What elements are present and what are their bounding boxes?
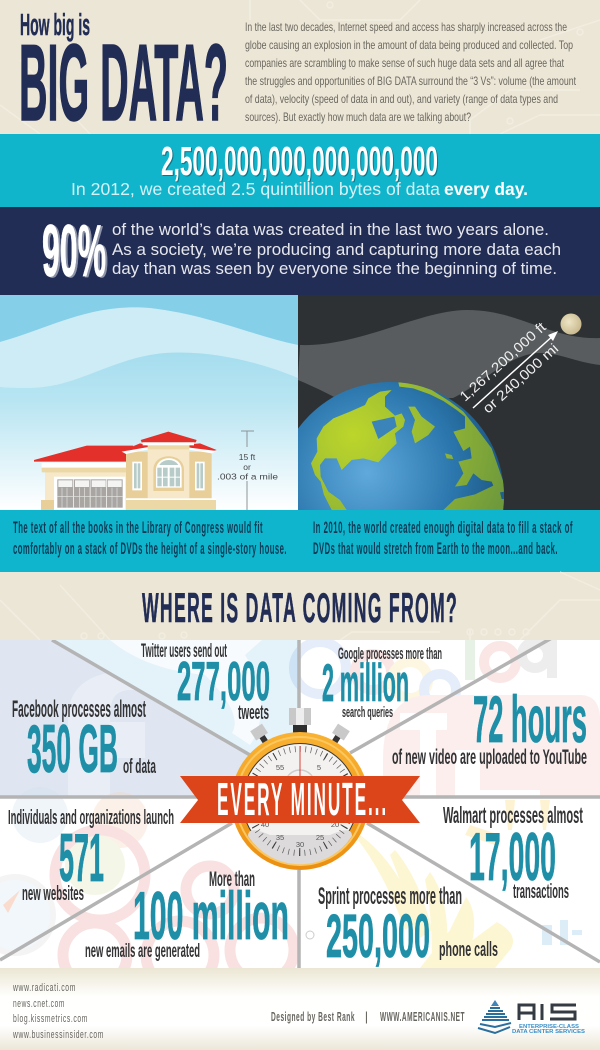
arrow: earth to moon distance bbox=[473, 331, 558, 408]
watermark: google bbox=[294, 640, 552, 706]
sources: blog.kissmetrics.com bbox=[13, 1013, 88, 1025]
banner: 90 percent: As a society, we’re producing and capturing more data each bbox=[112, 240, 561, 259]
diagonal dividers bbox=[0, 635, 600, 968]
stat: facebook: 350 GB bbox=[27, 711, 118, 787]
sources: www.businessinsider.com bbox=[12, 1029, 104, 1041]
height measure: .003 of a mile bbox=[217, 472, 278, 482]
logo: AIS: DATA CENTER SERVICES bbox=[512, 1029, 585, 1035]
logo: AIS: ENTERPRISE-CLASS bbox=[519, 1024, 579, 1030]
caption band: comfortably on a stack of DVDs the height of a single-story house. bbox=[13, 540, 287, 558]
banner: 2.5 quintillion: every day. bbox=[444, 179, 528, 199]
stat: walmart bbox=[443, 802, 583, 903]
icon: earth bbox=[298, 382, 504, 510]
distance labels bbox=[456, 319, 561, 416]
icon: stopwatch: 30 bbox=[296, 840, 304, 849]
watermark: twitter bbox=[52, 640, 298, 760]
stat: google: search queries bbox=[342, 704, 393, 721]
stat: sprint bbox=[318, 883, 498, 970]
panel: every minute stats: Google processes more than bbox=[338, 644, 442, 663]
stat: facebook bbox=[12, 700, 156, 774]
icon: stopwatch: 35 bbox=[276, 833, 284, 842]
icon: stopwatch: 20 bbox=[331, 820, 339, 829]
stat: google: 2 million bbox=[322, 654, 409, 713]
watermark: sprint fan bbox=[358, 835, 513, 968]
watermark: walmart bbox=[306, 800, 582, 945]
icon: stopwatch bbox=[231, 708, 369, 870]
icon: stopwatch: 25 bbox=[316, 833, 324, 842]
watermark: facebook bbox=[0, 640, 250, 797]
stat: sprint: 250,000 bbox=[326, 902, 430, 970]
watermark: email at signs bbox=[55, 830, 294, 989]
height measure bbox=[217, 431, 278, 510]
stat: websites: new websites bbox=[22, 883, 84, 905]
banner: 90 percent: of the world’s data was created in the last two years alone. bbox=[112, 220, 549, 239]
sources: news.cnet.com bbox=[13, 998, 65, 1010]
banner: 90 percent: 90% bbox=[42, 211, 106, 292]
caption: earth to moon bbox=[313, 519, 573, 558]
title: How big is bbox=[20, 7, 90, 42]
stat: google bbox=[322, 644, 442, 721]
stat: twitter: Twitter users send out bbox=[141, 640, 227, 662]
stat: twitter bbox=[141, 640, 270, 724]
intro text bbox=[245, 20, 576, 124]
distance labels: or 240,000 mi bbox=[479, 340, 561, 416]
title bbox=[19, 7, 228, 144]
stat: youtube bbox=[392, 694, 587, 768]
credits: Designed by Best Rank bbox=[271, 1009, 355, 1024]
panel: every minute stats: 100 million bbox=[133, 878, 289, 954]
banner: 2.5 quintillion bbox=[0, 134, 600, 207]
stat: emails bbox=[85, 868, 289, 962]
height measure: or bbox=[243, 462, 251, 472]
banner: every minute bbox=[180, 773, 420, 825]
panel: every minute stats: Facebook processes almost bbox=[12, 696, 146, 723]
panel: house comparison bbox=[0, 295, 298, 510]
stat: websites bbox=[8, 807, 174, 905]
icon: stopwatch: 55 bbox=[276, 763, 284, 772]
distance labels: 1,267,200,000 ft bbox=[456, 319, 549, 404]
stat: emails: new emails are generated bbox=[85, 941, 200, 962]
caption: library of congress: The text of all the books in the Library of Congress would fit bbox=[13, 519, 263, 537]
height measure: 15 ft bbox=[239, 452, 256, 462]
panel: every minute stats: 277,000 bbox=[177, 650, 270, 712]
icon: stopwatch: 5 bbox=[317, 763, 321, 772]
stat: twitter: tweets bbox=[238, 702, 269, 724]
caption: library of congress bbox=[13, 519, 287, 558]
credits: WWW.AMERICANIS.NET bbox=[380, 1009, 465, 1024]
footer bbox=[0, 968, 600, 1050]
section heading band bbox=[0, 572, 600, 640]
stat: facebook: of data bbox=[123, 756, 156, 778]
icon: moon bbox=[560, 314, 582, 334]
credits: | bbox=[365, 1009, 369, 1024]
intro text: sources). But exactly how much data are we talking about? bbox=[245, 110, 471, 124]
stat: websites: 571 bbox=[59, 820, 104, 896]
stat: sprint: phone calls bbox=[439, 939, 498, 961]
logo: AIS bbox=[478, 1000, 585, 1035]
caption band bbox=[0, 510, 600, 572]
panel: every minute stats bbox=[0, 635, 600, 989]
panel: earth to moon bbox=[298, 295, 600, 510]
watermark: youtube bbox=[383, 695, 600, 797]
banner: 2.5 quintillion: In 2012, we created 2.5 quintillion bytes of data bbox=[71, 179, 440, 199]
icon: stopwatch: 40 bbox=[261, 820, 269, 829]
banner: 90 percent: day than was seen by everyone since the beginning of time. bbox=[112, 259, 557, 278]
sources: www.radicati.com bbox=[12, 982, 76, 994]
banner: 90 percent bbox=[0, 207, 600, 295]
stat: emails: More than bbox=[209, 868, 255, 891]
sources bbox=[12, 982, 104, 1041]
panel: every minute stats: Individuals and organizations launch bbox=[8, 807, 174, 829]
icon: house bbox=[34, 432, 217, 510]
header panel: BIG DATA? bbox=[19, 22, 228, 144]
watermark: browsers bbox=[0, 787, 148, 953]
